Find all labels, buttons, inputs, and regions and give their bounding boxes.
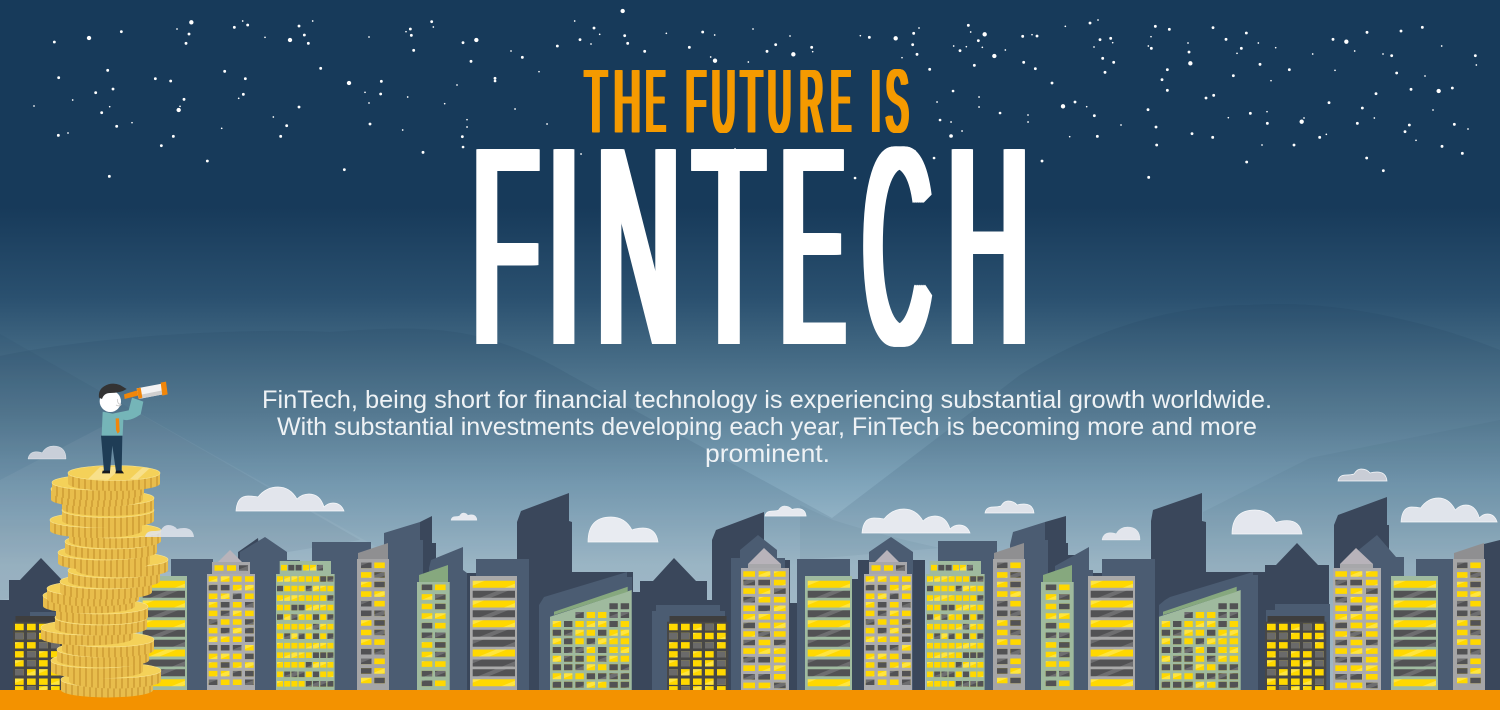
stars	[34, 11, 1476, 178]
title: fintech: F	[473, 88, 538, 404]
stars: beside the title	[463, 81, 1028, 178]
grey tower	[741, 548, 789, 690]
grey tower	[207, 550, 257, 690]
cloud	[765, 506, 806, 516]
text: T	[585, 52, 607, 152]
tie	[116, 418, 120, 434]
striped grey building	[1088, 576, 1135, 690]
text: S	[886, 52, 909, 152]
title: fintech: T	[694, 88, 764, 404]
clouds	[28, 446, 1497, 542]
cloud	[451, 513, 477, 520]
text: U	[712, 52, 734, 152]
text: H	[614, 52, 640, 152]
cloud	[1102, 527, 1140, 540]
stars: right sky	[1005, 20, 1476, 177]
intro text	[262, 386, 1272, 468]
striped green building	[140, 576, 187, 690]
text: T	[741, 52, 762, 152]
grey tower	[1333, 548, 1381, 690]
text: U	[768, 52, 791, 152]
text: E	[646, 52, 665, 152]
stars: centre sky	[511, 11, 994, 72]
person with telescope	[99, 382, 168, 473]
telescope	[124, 382, 168, 399]
trousers	[101, 436, 122, 472]
city skyline: middle silhouettes	[30, 522, 1453, 690]
narrow grey tower	[993, 543, 1025, 690]
grey tower	[864, 550, 914, 690]
wide green tower	[926, 561, 985, 690]
title: fintech: E	[781, 88, 844, 404]
striped green building	[1391, 576, 1438, 690]
dark office block	[13, 616, 74, 690]
cloud	[28, 446, 66, 459]
title: fintech: I	[549, 88, 579, 404]
cloud in front of the coins	[145, 525, 194, 537]
text: F	[686, 52, 706, 152]
narrow green tower	[1041, 565, 1074, 690]
slanted green building	[1159, 587, 1241, 690]
intro text: FinTech, being short for financial technology is experiencing substantial growth worldwide.	[262, 386, 1272, 414]
narrow green tower	[417, 565, 450, 690]
orange ground	[0, 690, 1500, 710]
striped green building	[805, 576, 852, 690]
title: the future is	[584, 52, 918, 347]
dark office block	[1265, 616, 1326, 690]
hair	[99, 384, 127, 399]
text: I	[871, 52, 880, 152]
title: fintech: H	[948, 88, 1029, 404]
cloud	[588, 517, 658, 542]
text: R	[800, 52, 822, 152]
cloud	[1401, 498, 1497, 522]
intro text: prominent.	[705, 440, 830, 468]
text: E	[831, 52, 850, 152]
city skyline: rear dark silhouettes	[0, 493, 1500, 690]
cloud	[236, 487, 344, 511]
cloud	[862, 509, 970, 533]
face	[116, 399, 121, 406]
cloud	[1232, 510, 1302, 534]
head	[100, 391, 121, 412]
shirt and arm	[102, 398, 143, 436]
background hills	[0, 304, 1500, 700]
cloud	[985, 501, 1034, 513]
narrow grey tower	[1453, 543, 1485, 690]
dark office block	[667, 616, 728, 690]
narrow grey tower	[357, 543, 389, 690]
foreground buildings	[13, 543, 1485, 690]
slanted green building	[550, 587, 632, 690]
title: fintech: N	[597, 88, 680, 404]
stars: left sky	[34, 21, 495, 176]
intro text: With substantial investments developing each year, FinTech is becoming more and more	[277, 413, 1257, 441]
shoes	[102, 471, 124, 473]
striped grey building	[470, 576, 517, 690]
title: fintech	[473, 88, 1029, 404]
stack of gold coins	[41, 466, 168, 698]
wide green tower	[276, 561, 335, 690]
cloud	[1338, 469, 1387, 481]
title: fintech: C	[864, 88, 930, 404]
